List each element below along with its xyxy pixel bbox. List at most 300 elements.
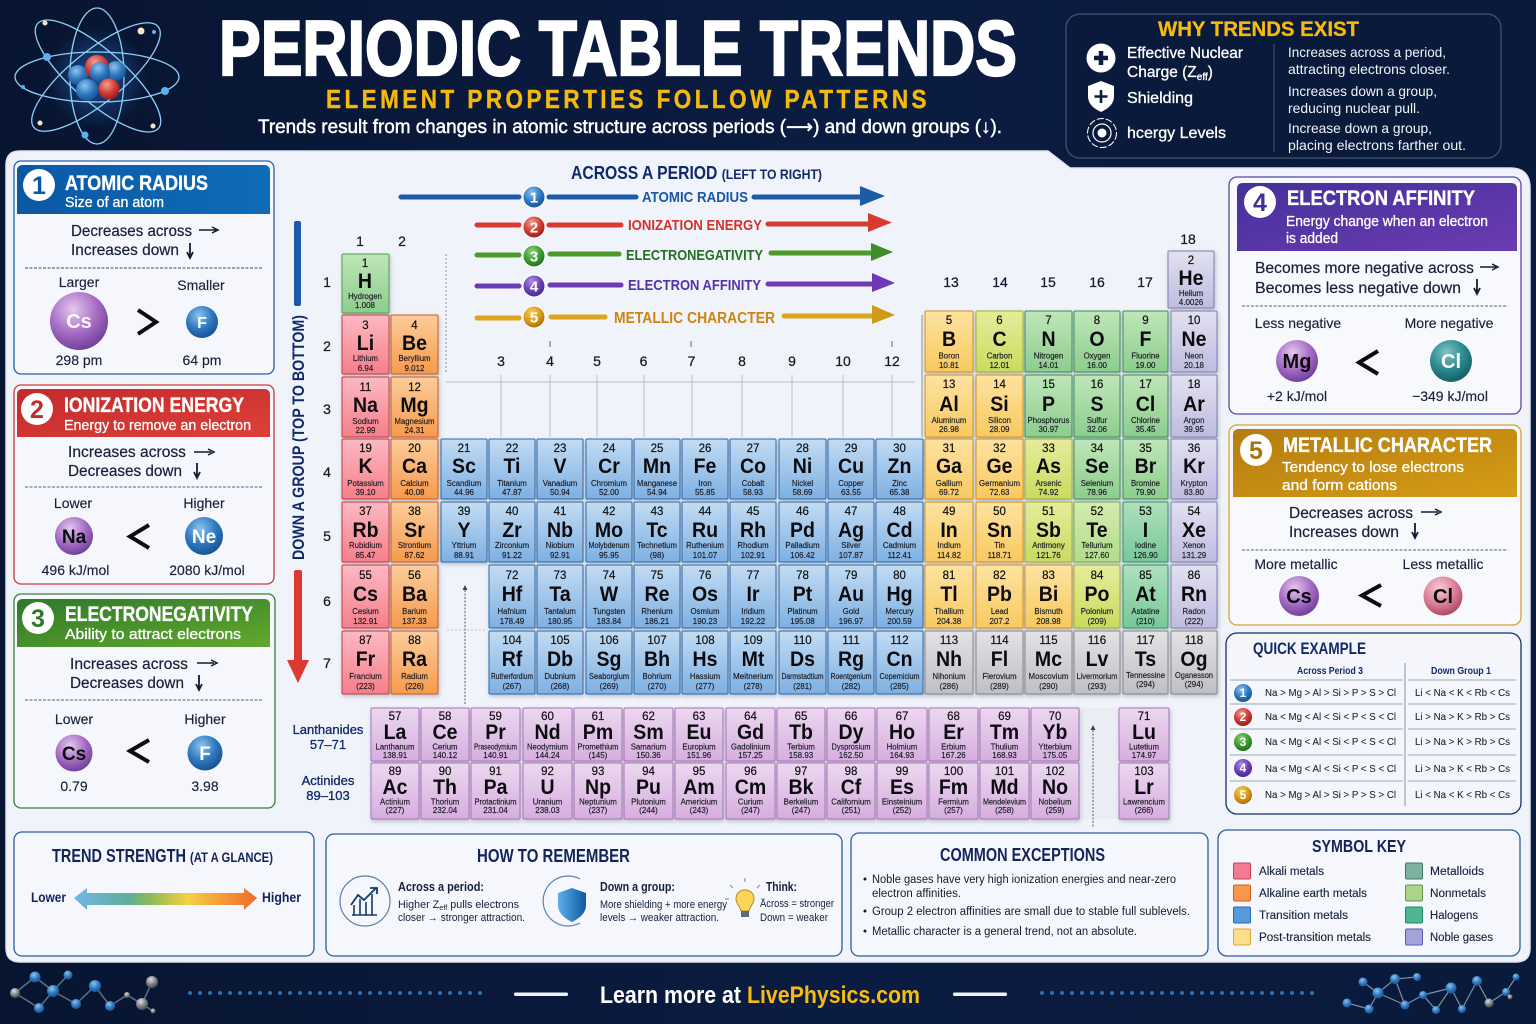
element: Sc: Scandium: [447, 479, 481, 488]
icon: plus circle: [1086, 44, 1116, 72]
element: Ag: [828, 502, 874, 562]
element: He: 4.0026: [1179, 298, 1204, 307]
panel: how to remember: Across = stronger: [760, 898, 834, 910]
element: Fe: 26: [699, 443, 711, 455]
element: Nd: [523, 708, 572, 761]
panel 1: atomic radius: Larger: [59, 274, 100, 290]
trend arrow 4: electron affinity: 4: [530, 278, 539, 296]
element: Bi: 83: [1042, 570, 1055, 582]
element: Cn: Cn: [886, 648, 913, 671]
group numbers: 8: [738, 353, 746, 369]
element: Rb: 37: [359, 506, 372, 518]
element: Fr: 87: [359, 635, 372, 647]
panel: how to remember: [326, 834, 842, 956]
element: Si: Si: [990, 393, 1009, 416]
element: Sb: Sb: [1036, 519, 1061, 542]
element: Mg: 24.31: [404, 426, 425, 435]
element: O: 8: [1094, 315, 1100, 327]
element: Au: 196.97: [839, 617, 864, 626]
element: In: [925, 502, 973, 562]
icon: shield: [1088, 81, 1114, 112]
element: Er: 167.26: [941, 751, 966, 760]
element: Zr: 40: [506, 506, 518, 518]
element: Eu: Europium: [682, 742, 716, 752]
element: Rn: Rn: [1181, 583, 1207, 606]
element: Th: [421, 763, 469, 819]
element: Ti: Titanium: [497, 479, 527, 488]
element: La: 138.91: [383, 751, 408, 760]
element: Mo: 95.95: [599, 551, 620, 560]
element: Pt: 195.08: [790, 617, 815, 626]
element: Bi: Bismuth: [1034, 607, 1063, 616]
footer: right molecule: [1342, 973, 1520, 1014]
element: Th: Th: [433, 776, 457, 799]
element: Cf: 98: [845, 766, 857, 778]
row 3: Na < Mg < Al < Si < P < S < Cl: [1265, 736, 1396, 748]
element: Ag: Silver: [841, 541, 861, 550]
element: Sm: [624, 708, 673, 761]
element: Tc: Technetium: [637, 541, 677, 550]
element: Ac: [371, 763, 419, 819]
panel 5: metallic character: Tendency to lose electrons: [1282, 460, 1464, 476]
element: Sn: Sn: [987, 519, 1012, 542]
panel 4: electron affinity: 4: [1253, 189, 1267, 217]
heading: across a period: ACROSS A PERIOD (LEFT TO RIGHT): [571, 163, 822, 183]
panel 4: electron affinity: Mg: [1283, 351, 1311, 373]
element: Fe: 55.85: [695, 488, 716, 497]
element: I: Iodine: [1135, 541, 1156, 550]
element: Lu: [1119, 708, 1169, 761]
element: Np: 93: [592, 766, 604, 778]
text: factor labels: ): [1208, 64, 1213, 81]
element: Pd: 46: [796, 506, 809, 518]
element: Fl: (289): [990, 682, 1009, 691]
element: Np: (237): [589, 806, 608, 815]
period numbers: 7: [323, 655, 331, 671]
trend arrow 1: atomic radius: [401, 186, 885, 208]
element: Te: Te: [1086, 519, 1108, 542]
periodic table: [342, 251, 1217, 819]
element: Md: Md: [990, 776, 1019, 799]
element: Be: Be: [402, 332, 427, 355]
element: Tc: (98): [650, 551, 664, 560]
element: Ti: 22: [506, 443, 518, 455]
element: Fm: Fermium: [938, 798, 969, 806]
element: Og: (294): [1185, 680, 1204, 689]
element: Y: 88.91: [454, 551, 475, 560]
element: Bh: Bh: [644, 648, 670, 671]
element: In: 114.82: [937, 551, 961, 560]
element: I: [1123, 502, 1168, 562]
element: Ag: Ag: [838, 519, 864, 542]
element: C: Carbon: [987, 352, 1012, 360]
element: V: [537, 439, 583, 499]
element: Al: 13: [943, 379, 955, 391]
element: No: (259): [1046, 806, 1065, 815]
panel 4: electron affinity: Becomes less negative down: [1255, 280, 1461, 297]
element: Br: [1123, 439, 1168, 499]
period numbers: [323, 274, 331, 671]
element: Fm: 100: [944, 766, 963, 778]
panel 5: metallic character: Less metallic: [1403, 556, 1483, 572]
element: Ta: [537, 565, 583, 628]
group numbers: 13: [943, 274, 959, 290]
element: Er: 68: [947, 711, 960, 723]
element: Po: 84: [1091, 570, 1104, 582]
element: Nb: 92.91: [550, 551, 571, 560]
panel 5: metallic character: and form cations: [1282, 478, 1397, 494]
trend arrow 2: ionization energy: [477, 213, 892, 238]
element: Ru: [682, 502, 728, 562]
row 4: 4: [1240, 761, 1247, 775]
element: Nh: [925, 631, 973, 694]
element: Ds: (281): [793, 682, 812, 691]
element: Nd: 60: [541, 711, 554, 723]
element: K: Potassium: [347, 479, 384, 488]
bullet list: Metallic character is a general trend, not an absolute.: [872, 926, 1137, 938]
element: C: [976, 311, 1023, 372]
element: Pt: [779, 565, 826, 628]
element: Ce: Ce: [433, 721, 457, 744]
panel 3: electronegativity: 3: [31, 605, 45, 633]
element: Sb: Antimony: [1032, 541, 1065, 550]
panel 2: ionization energy: Increases across: [68, 444, 186, 461]
element: C: C: [992, 328, 1007, 351]
element: Sm: 150.36: [636, 751, 661, 760]
panel 5: metallic character: Cs: [1286, 586, 1312, 608]
element: Mo: Mo: [595, 519, 623, 542]
element: Se: 78.96: [1087, 488, 1108, 497]
element: Ce: 140.12: [433, 751, 458, 760]
panel: how to remember: More shielding + more energy: [600, 899, 727, 911]
element: Po: Polonium: [1081, 607, 1113, 616]
panel 4: electron affinity: Energy change when an electron: [1286, 214, 1488, 230]
element: Si: [976, 375, 1023, 437]
element: Nb: Niobium: [546, 541, 574, 550]
panel 1: atomic radius: [14, 161, 274, 374]
element: Ta: Tantalum: [544, 607, 576, 616]
element: Mc: 115: [1039, 635, 1058, 647]
element: V: Vanadium: [543, 479, 577, 488]
element: Hs: (277): [696, 682, 715, 691]
panel 2: ionization energy: Energy to remove an electron: [64, 418, 251, 434]
element: Si: 28.09: [989, 425, 1010, 434]
trend arrow 2: ionization energy: IONIZATION ENERGY: [628, 217, 762, 234]
element: No: Nobelium: [1039, 798, 1071, 806]
element: Rh: 45: [747, 506, 759, 518]
element: Kr: 36: [1188, 443, 1200, 455]
element: Bk: 97: [795, 766, 807, 778]
element: Fm: (257): [944, 806, 963, 815]
element: Ac: (227): [386, 806, 405, 815]
element: Ce: [421, 708, 469, 761]
element: As: As: [1036, 455, 1061, 478]
panel 2: ionization energy: Decreases down: [68, 463, 182, 480]
element: Ir: [730, 565, 776, 628]
element: B: 5: [946, 315, 952, 327]
element: Lr: Lawrencium: [1123, 798, 1165, 806]
element: Lu: Lutetium: [1129, 742, 1159, 752]
element: Ag: 47: [845, 506, 857, 518]
element: Pb: [976, 565, 1023, 628]
element: Rh: 102.91: [741, 551, 766, 560]
trend arrow 5: metallic character: 5: [530, 310, 538, 326]
element: Na: Na: [353, 394, 379, 417]
element: P: 30.97: [1038, 425, 1059, 434]
element: As: [1025, 439, 1072, 499]
element: Nb: 41: [554, 506, 566, 518]
element: Sr: Sr: [404, 519, 425, 542]
element: Cf: (251): [842, 806, 861, 815]
element: Ti: [489, 439, 535, 499]
element: H: 1: [362, 258, 368, 270]
element: Ti: 47.87: [502, 488, 523, 497]
element: Pa: 231.04: [483, 806, 508, 815]
panel: how to remember: Down = weaker: [760, 912, 828, 924]
element: Pm: (145): [589, 751, 608, 760]
element: Lv: [1074, 631, 1120, 694]
group numbers: 15: [1040, 274, 1056, 290]
element: Tm: Thulium: [991, 742, 1018, 752]
element: Cm: [726, 763, 775, 819]
element: Fe: Fe: [694, 455, 716, 478]
element: Tb: Terbium: [787, 742, 815, 752]
element: Sg: (269): [600, 682, 619, 691]
element: Cr: 24: [603, 443, 616, 455]
element: Ta: Ta: [549, 583, 571, 606]
element: Md: 101: [995, 766, 1014, 778]
element: Mt: Mt: [742, 648, 765, 671]
key labels: Metalloids: [1430, 866, 1484, 878]
element: He: 2: [1188, 255, 1194, 267]
element: Li: Li: [357, 332, 374, 355]
footer: left rule: [514, 992, 568, 996]
row 5: [1234, 786, 1510, 804]
trend arrow 5: metallic character: [477, 305, 895, 328]
element: Es: Es: [890, 776, 914, 799]
element: Mn: Mn: [643, 455, 671, 478]
element: Cl: 17: [1139, 379, 1152, 391]
element: Ac: 89: [389, 766, 401, 778]
element: Li: 6.94: [358, 364, 374, 373]
element: W: [586, 565, 632, 628]
panel 5: metallic character: [1229, 425, 1521, 625]
panel 1: atomic radius: ATOMIC RADIUS: [65, 172, 208, 195]
element: B: [925, 311, 973, 372]
element: Hg: 80: [893, 570, 906, 582]
element: Fl: [976, 631, 1023, 694]
element: Bh: 107: [647, 635, 667, 647]
element: Mc: (290): [1039, 682, 1058, 691]
row 3: 3: [1240, 735, 1247, 749]
element: Xe: Xenon: [1183, 541, 1205, 550]
panel 5: metallic character: More metallic: [1254, 556, 1338, 572]
element: Sb: 51: [1042, 506, 1055, 518]
period numbers: 6: [323, 593, 331, 609]
element: Bh: Bohrium: [642, 672, 672, 681]
element: Se: Se: [1085, 455, 1109, 478]
element: Es: Einsteinium: [882, 798, 922, 806]
element: Yb: 70: [1049, 711, 1061, 723]
element: Kr: [1171, 439, 1217, 499]
element: Sc: 21: [458, 443, 470, 455]
panel: how to remember: closer → stronger attraction.: [398, 912, 525, 924]
element: Lu: 174.97: [1132, 751, 1157, 760]
element: Ce: Cerium: [432, 742, 458, 752]
element: Gd: [726, 708, 775, 761]
group numbers: 10: [835, 353, 851, 369]
element: W: W: [600, 583, 619, 606]
element: Xe: 131.29: [1182, 551, 1207, 560]
element: Ca: 20: [408, 443, 421, 455]
key labels: Nonmetals: [1430, 888, 1486, 900]
element: Ac: Ac: [383, 776, 407, 799]
trend arrow 1: atomic radius: 1: [530, 190, 538, 206]
element: He: He: [1179, 267, 1203, 290]
element: Cr: [586, 439, 632, 499]
label: lanthanides and actinides: Actinides: [302, 773, 355, 788]
element: Er: Er: [943, 721, 964, 744]
element: Bi: Bi: [1039, 583, 1058, 606]
element: Rb: Rb: [352, 519, 379, 542]
group numbers: 5: [593, 353, 601, 369]
element: Ti: Ti: [503, 455, 521, 478]
element: Ge: Ge: [986, 455, 1013, 478]
element: Ba: 56: [408, 570, 421, 582]
trend arrow 2: ionization energy: 2: [530, 220, 538, 236]
element: Rb: Rubidium: [349, 541, 382, 550]
text: factor explanations: Increases across a period,: [1288, 44, 1446, 60]
element: Fe: Iron: [698, 479, 712, 488]
panel 1: atomic radius: 64 pm: [183, 352, 221, 368]
footer: right rule: [953, 992, 1007, 996]
panel: trend strength: TREND STRENGTH (AT A GLANCE): [52, 846, 273, 866]
element: No: No: [1042, 776, 1068, 799]
element: Co: [730, 439, 776, 499]
element: Fl: Fl: [991, 648, 1008, 671]
element: H: 1.008: [355, 301, 376, 310]
panel 3: electronegativity: Cs: [62, 744, 86, 765]
element: Ga: Ga: [936, 455, 963, 478]
element: Pa: 91: [489, 766, 502, 778]
text: factor explanations: attracting electrons closer.: [1288, 61, 1450, 77]
panel 3: electronegativity: 3.98: [191, 778, 219, 794]
element: Po: [1074, 565, 1120, 628]
group numbers: 1: [356, 233, 364, 249]
label: lanthanides and actinides: Lanthanides: [293, 722, 364, 737]
text: factor labels: [1127, 45, 1243, 142]
element: Cm: Curium: [738, 798, 763, 806]
panel 4: electron affinity: More negative: [1405, 315, 1494, 331]
element: Mn: [634, 439, 680, 499]
key swatches: [1234, 863, 1422, 945]
element: Tb: 65: [795, 711, 807, 723]
element: La: Lanthanum: [375, 742, 415, 752]
element: Pr: Pr: [485, 721, 506, 744]
trend arrow 3: electronegativity: [477, 243, 893, 267]
element: Pu: (244): [639, 806, 658, 815]
key labels: Transition metals: [1259, 910, 1348, 922]
element: He: Helium: [1179, 289, 1203, 298]
element: Hs: [682, 631, 728, 694]
element: Tb: [777, 708, 825, 761]
element: At: At: [1135, 583, 1156, 606]
element: Ge: Germanium: [979, 479, 1020, 488]
panel 4: electron affinity: [1229, 177, 1521, 414]
element: Si: 14: [993, 379, 1006, 391]
element: Au: [828, 565, 874, 628]
element: At: (210): [1136, 617, 1155, 626]
element: Ca: Calcium: [400, 479, 429, 488]
element: Bi: 208.98: [1036, 617, 1061, 626]
row 1: [1234, 684, 1510, 702]
element: Se: 34: [1091, 443, 1104, 455]
element: P: [1025, 375, 1072, 437]
row 4: [1234, 759, 1510, 777]
element: W: Tungsten: [593, 607, 625, 616]
text: factor explanations: Increases down a group,: [1288, 83, 1437, 99]
element: Cd: [876, 502, 923, 562]
element: Tb: Tb: [789, 721, 813, 744]
panel 3: electronegativity: [14, 594, 275, 808]
element: F: [1123, 311, 1168, 372]
element: Cs: 55: [359, 570, 372, 582]
element: Tb: 158.93: [789, 751, 814, 760]
element: Cn: (285): [890, 682, 909, 691]
element: Sr: Strontium: [398, 541, 431, 550]
element: Fe: [682, 439, 728, 499]
group numbers: 16: [1089, 274, 1105, 290]
element: Rn: (222): [1185, 617, 1204, 626]
panel: quick example: Down Group 1: [1431, 665, 1491, 677]
element: Hg: [876, 565, 923, 628]
element: Fl: Flerovium: [982, 672, 1017, 681]
element: In: In: [940, 519, 958, 542]
element: Cr: 52.00: [599, 488, 620, 497]
element: Sc: 44.96: [454, 488, 475, 497]
element: Fr: Fr: [356, 648, 375, 671]
element: Al: Aluminum: [932, 416, 966, 425]
element: Rb: 85.47: [355, 551, 376, 560]
element: Ca: [391, 439, 438, 499]
element: B: B: [942, 328, 956, 351]
element: Eu: 63: [693, 711, 705, 723]
element: Pt: Pt: [793, 583, 813, 606]
label: lanthanides and actinides: [293, 722, 364, 803]
element: Si: Silicon: [988, 416, 1011, 425]
panel: trend strength: Higher: [262, 889, 301, 905]
element: Fr: (223): [356, 682, 375, 691]
element: Nd: 144.24: [535, 751, 560, 760]
panel 1: atomic radius: Size of an atom: [65, 195, 164, 211]
panel 4: electron affinity: is added: [1286, 231, 1338, 247]
element: C: 12.01: [989, 361, 1010, 370]
panel 3: electronegativity: Lower: [55, 711, 93, 727]
element: Os: [682, 565, 728, 628]
element: Bk: Bk: [789, 776, 814, 799]
panel 4: electron affinity: +2 kJ/mol: [1267, 388, 1327, 404]
heading: quick example: QUICK EXAMPLE: [1253, 639, 1366, 658]
element: Th: 232.04: [433, 806, 458, 815]
element: Am: Americium: [681, 798, 717, 806]
element: Cl: 35.45: [1135, 425, 1156, 434]
element: Ts: Ts: [1135, 648, 1156, 671]
element: P: Phosphorus: [1028, 416, 1070, 425]
element: La: [371, 708, 419, 761]
footer: right dots: [1042, 991, 1322, 995]
element: Md: [980, 763, 1029, 819]
element: Nh: 113: [940, 635, 958, 647]
